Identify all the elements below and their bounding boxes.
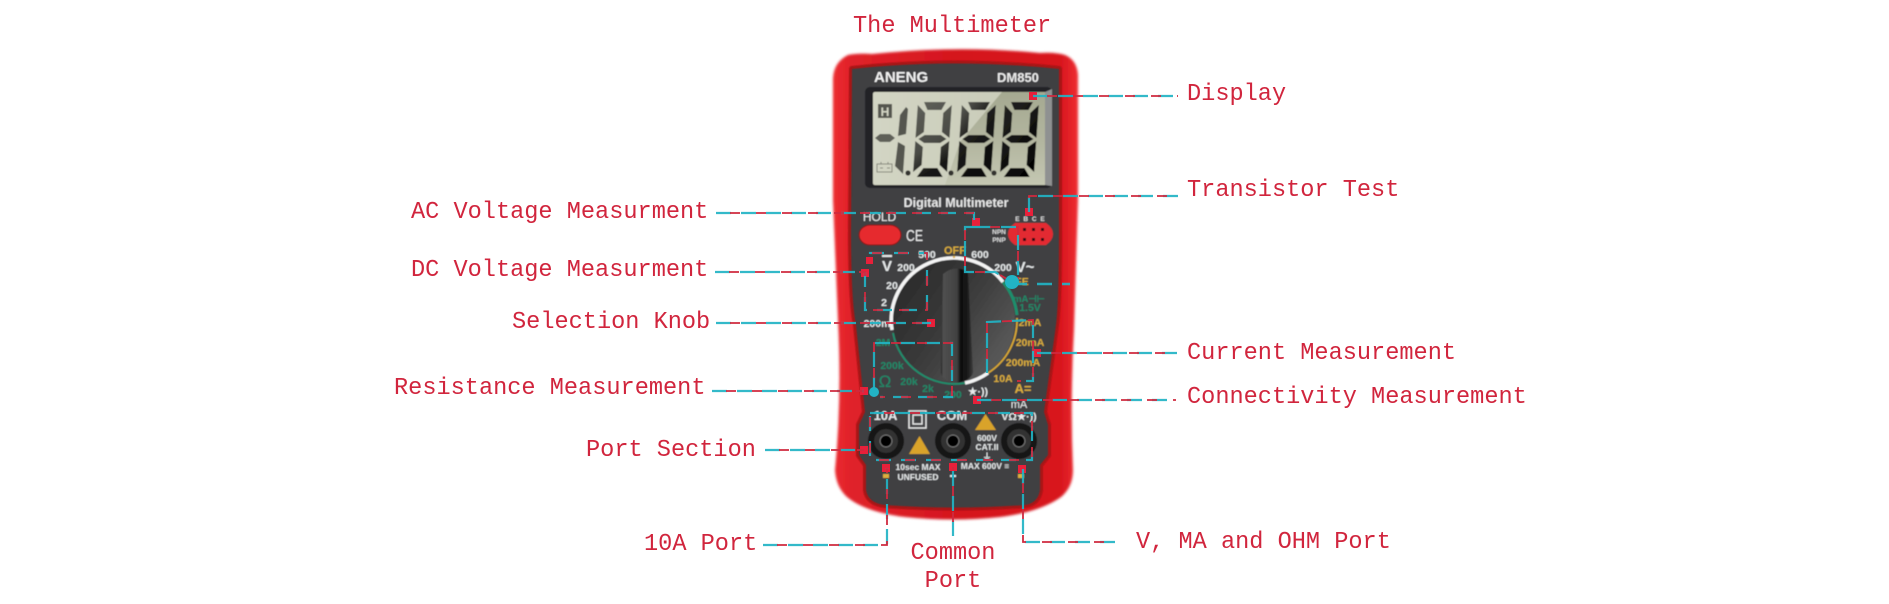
callout: dc voltage measurement: DC Voltage Measurment (411, 257, 708, 284)
callout: ac voltage measurement: AC Voltage Measurment (411, 199, 708, 226)
dial range labels: 200 (897, 262, 915, 274)
dial range labels: 200 (994, 262, 1012, 274)
callout: connectivity measurement: Connectivity Measurement (1187, 384, 1527, 411)
dial range labels: V~ (1016, 259, 1035, 276)
dial range labels: FE (1015, 276, 1029, 288)
double insulation icon (909, 411, 926, 428)
callout: port section: Port Section (586, 437, 756, 464)
hold button (859, 225, 901, 245)
port labels: COM (937, 408, 967, 423)
warning triangle lower (909, 436, 930, 454)
knob grip (941, 268, 973, 383)
dial range labels: 2k (922, 383, 934, 395)
transistor socket: PNP (992, 237, 1006, 244)
dark faceplate (851, 64, 1059, 508)
digital multimeter caption: Digital Multimeter (904, 196, 1009, 210)
dial range labels: 2 (881, 297, 887, 309)
callout: ac voltage measurement (411, 199, 1070, 289)
title: The Multimeter (853, 13, 1051, 40)
dial range labels: A= (1015, 381, 1032, 396)
callout: connectivity measurement (973, 384, 1527, 411)
digit one (895, 107, 908, 174)
rotary dial (891, 258, 1017, 384)
callout: current measurement: Current Measurement (1187, 340, 1456, 367)
hold indicator: H (881, 105, 889, 119)
port labels: ⏚ (982, 452, 992, 462)
callout: resistance measurement: Resistance Measurement (394, 375, 706, 402)
dial range labels: 1.5V (1019, 302, 1041, 314)
dial range labels: 2M (876, 337, 891, 349)
dial range labels: 2mA (1019, 317, 1042, 329)
dial range labels: 200mA (1006, 357, 1041, 369)
port labels (874, 399, 1037, 462)
port labels: mA (1011, 399, 1028, 411)
case inner shadow (851, 64, 1059, 508)
callout: 10a port (644, 464, 890, 558)
callout: v, ma and ohm port: V, MA and OHM Port (1136, 529, 1391, 556)
callout: common port (911, 463, 995, 595)
dial range labels: 20mA (1016, 337, 1045, 349)
callout: display: Display (1187, 81, 1286, 108)
callout: selection knob: Selection Knob (512, 309, 710, 336)
dial range labels: 20k (900, 376, 918, 388)
callout: v, ma and ohm port (1018, 465, 1391, 556)
dial range labels: 20 (886, 280, 898, 292)
port labels: 600V (977, 433, 997, 443)
dial range labels: 500 (918, 249, 936, 261)
port labels: CAT.II (976, 442, 998, 452)
dial range labels: ★·)) (968, 386, 988, 398)
display bezel (865, 87, 1052, 188)
device face (851, 64, 1059, 508)
hold indicator (878, 104, 892, 119)
callout: resistance measurement (394, 343, 952, 402)
multimeter device (833, 49, 1078, 520)
hold label: HOLD (863, 210, 897, 224)
dial range labels (864, 245, 1046, 401)
port warnings: MAX 600V ≡ (961, 461, 1009, 471)
transistor socket: E B C E (1015, 216, 1045, 223)
red rubber case (833, 49, 1078, 520)
callout: display (1029, 81, 1286, 108)
port warnings: 10sec MAX (896, 462, 941, 472)
callout: 10a port: 10A Port (644, 531, 757, 558)
callout: port section (586, 413, 1032, 464)
dial range labels: V (882, 258, 892, 275)
dial range labels: 600 (971, 249, 989, 261)
dial range labels: 200k (880, 360, 904, 372)
model number: DM850 (997, 70, 1039, 85)
dial arcs (891, 258, 1017, 384)
lcd screen (873, 92, 1045, 185)
callout: current measurement (987, 320, 1456, 381)
port warnings: UNFUSED (897, 472, 939, 482)
dial range labels: 200 (944, 389, 962, 401)
warning triangle upper (975, 414, 996, 430)
dial range labels: 200m (864, 318, 890, 330)
callout: common port: Common (911, 540, 995, 567)
dial range labels: mA⊣⊢ (1013, 294, 1046, 305)
port warnings (883, 461, 1024, 482)
callout: transistor test: Transistor Test (1187, 177, 1399, 204)
port labels: VΩ★·)) (1001, 411, 1037, 423)
digits (913, 102, 952, 177)
callout: common port: Port (925, 568, 981, 595)
bezel highlight (1045, 89, 1052, 186)
callout: dc voltage measurement (411, 253, 927, 310)
minus sign (875, 134, 895, 142)
callout: transistor test (1025, 177, 1399, 216)
transistor socket (992, 216, 1053, 245)
battery icon (877, 162, 892, 172)
decimal points (905, 170, 997, 176)
dial range labels: Ω (879, 372, 891, 391)
callout: selection knob (512, 309, 935, 336)
transistor socket: NPN (992, 229, 1006, 236)
input ports (868, 423, 1037, 459)
dial range labels: 10A (993, 373, 1013, 385)
ce mark: CE (906, 228, 923, 245)
port labels: 10A (874, 408, 898, 423)
brand logo: ANENG (874, 69, 928, 86)
lcd reflection (945, 92, 1045, 185)
dial range labels: OFF (944, 245, 966, 257)
